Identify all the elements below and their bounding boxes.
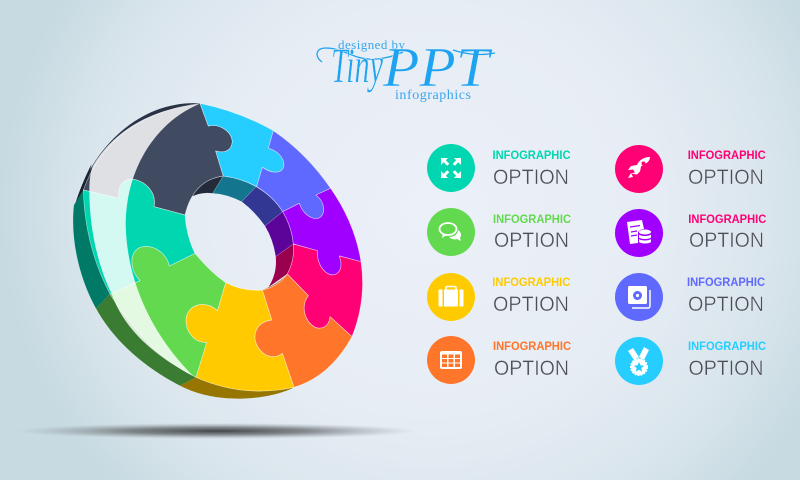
- logo: designed by Tiny PPT infographics: Tiny: [331, 37, 383, 93]
- option 7: blue gear window: [615, 273, 765, 321]
- piece: orange: [255, 274, 352, 387]
- option 4: orange table: [427, 336, 571, 384]
- logo: designed by Tiny PPT infographics: [317, 37, 495, 103]
- piece: purple: [283, 188, 361, 275]
- logo: designed by Tiny PPT infographics: designed by: [338, 37, 406, 52]
- option 8: cyan medal: OPTION: [688, 357, 764, 380]
- ground shadow: [17, 423, 417, 439]
- option 8: cyan medal: [615, 337, 766, 385]
- option 5: pink rocket: [615, 145, 766, 193]
- option 2: green chat: INFOGRAPHIC: [493, 214, 571, 226]
- puzzle ring chart: [73, 103, 363, 399]
- option 7: blue gear window: OPTION: [688, 293, 764, 316]
- piece: cyan: [200, 103, 284, 187]
- option 8: cyan medal: INFOGRAPHIC: [688, 341, 766, 353]
- option 3: yellow briefcase: OPTION: [493, 293, 569, 316]
- piece: yellow: [186, 283, 294, 391]
- option 5: pink rocket: INFOGRAPHIC: [688, 150, 766, 162]
- option 1: teal expand: [427, 144, 570, 192]
- option 3: yellow briefcase: INFOGRAPHIC: [492, 277, 570, 289]
- option 7: blue gear window: INFOGRAPHIC: [687, 277, 765, 289]
- option 6: purple report and database: OPTION: [689, 229, 764, 252]
- hole inner wall: [189, 176, 294, 290]
- logo: designed by Tiny PPT infographics: infographics: [395, 88, 471, 103]
- option 3: yellow briefcase: [427, 273, 570, 321]
- option 1: teal expand: OPTION: [493, 166, 569, 189]
- option 5: pink rocket: OPTION: [688, 166, 764, 189]
- piece: teal: [83, 179, 195, 294]
- puzzle pieces: [83, 103, 363, 391]
- option 4: orange table: OPTION: [494, 357, 569, 380]
- glossy highlight: [89, 104, 199, 376]
- option 6: purple report and database: INFOGRAPHIC: [688, 214, 766, 226]
- option 2: green chat: [427, 208, 571, 256]
- option 1: teal expand: INFOGRAPHIC: [492, 150, 570, 162]
- piece: pink: [287, 244, 363, 337]
- option 2: green chat: OPTION: [494, 229, 569, 252]
- option 4: orange table: INFOGRAPHIC: [493, 341, 571, 353]
- piece: blue: [257, 131, 331, 219]
- option 6: purple report and database: [615, 209, 766, 257]
- ring side wall: [73, 103, 294, 399]
- piece: navy: [83, 103, 232, 215]
- piece: green: [110, 246, 226, 377]
- logo: designed by Tiny PPT infographics: PPT: [382, 37, 493, 99]
